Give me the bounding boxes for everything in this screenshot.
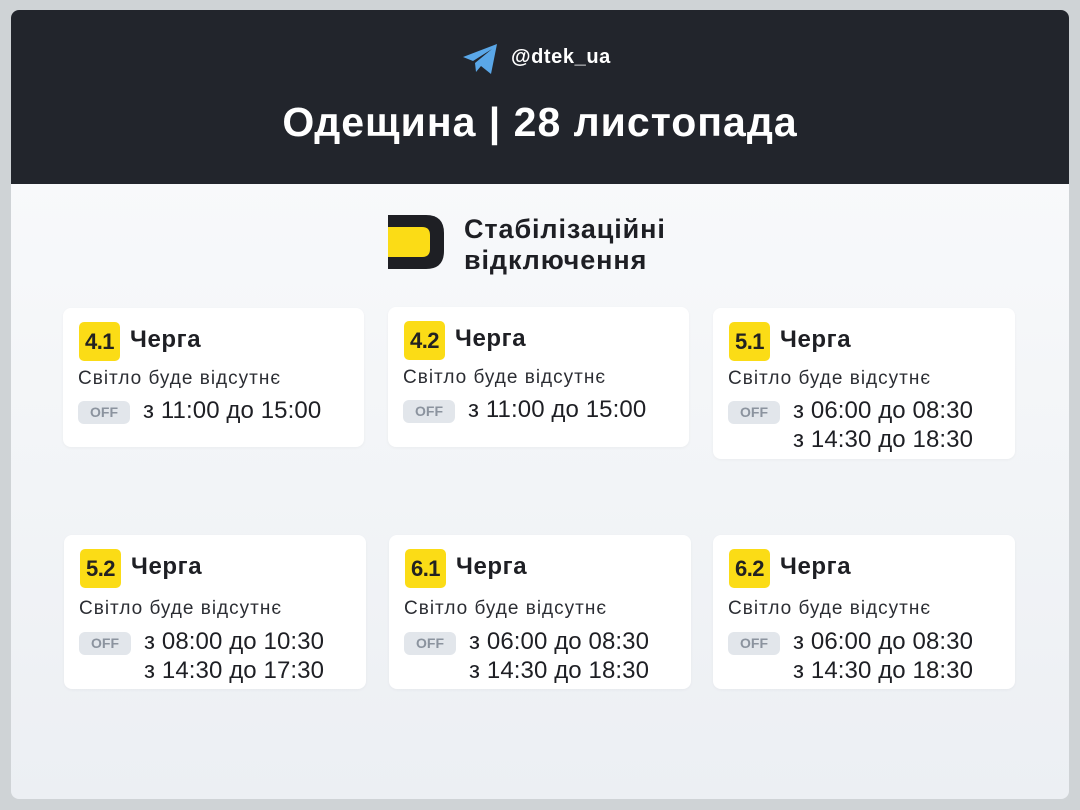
card 6.1 (389, 535, 691, 689)
card 4.2: Світло буде відсутнє (403, 367, 606, 388)
logo block (388, 214, 666, 275)
card 6.2: з 06:00 до 08:30 (793, 628, 973, 655)
card 5.2: з 08:00 до 10:30 (144, 628, 324, 655)
heading text: Стабілізаційні (464, 214, 666, 244)
icon: D logo (388, 215, 444, 269)
icon: telegram (463, 44, 497, 74)
header (11, 10, 1069, 184)
card 5.2 (64, 535, 366, 689)
card 6.2 (713, 535, 1015, 689)
card 4.2: OFF (415, 403, 443, 419)
card 5.1: з 06:00 до 08:30 (793, 397, 973, 424)
card 6.1: OFF (416, 635, 444, 651)
heading text (464, 214, 666, 275)
card 4.1: з 11:00 до 15:00 (143, 397, 321, 424)
card 5.2: Світло буде відсутнє (79, 598, 282, 619)
card 4.1: Світло буде відсутнє (78, 368, 281, 389)
card 6.1: з 14:30 до 18:30 (469, 657, 649, 684)
card 4.2: з 11:00 до 15:00 (468, 396, 646, 423)
handle: @dtek_ua (511, 46, 611, 68)
title: Одещина | 28 листопада (282, 99, 798, 145)
card 4.2: 4.2 (410, 328, 439, 353)
card 6.1: Черга (456, 553, 527, 580)
card 5.1 (713, 308, 1015, 459)
heading text: відключення (464, 245, 647, 275)
card 4.1: 4.1 (85, 329, 114, 354)
card 6.1: Світло буде відсутнє (404, 598, 607, 619)
card 5.2: Черга (131, 553, 202, 580)
card 5.1: з 14:30 до 18:30 (793, 426, 973, 453)
card 6.2: Черга (780, 553, 851, 580)
card 4.1: Черга (130, 326, 201, 353)
card 5.2: OFF (91, 635, 119, 651)
card 4.1: OFF (90, 404, 118, 420)
card 5.2: 5.2 (86, 556, 115, 581)
card 6.2: Світло буде відсутнє (728, 598, 931, 619)
card 6.2: з 14:30 до 18:30 (793, 657, 973, 684)
card 4.2: Черга (455, 325, 526, 352)
card 5.1: Світло буде відсутнє (728, 368, 931, 389)
card 4.1 (63, 308, 364, 447)
card 5.1: Черга (780, 326, 851, 353)
card 5.2: з 14:30 до 17:30 (144, 657, 324, 684)
card 6.1: з 06:00 до 08:30 (469, 628, 649, 655)
card 5.1: 5.1 (735, 329, 764, 354)
card 6.1: 6.1 (411, 556, 440, 581)
card 6.2: OFF (740, 635, 768, 651)
card 4.2 (388, 307, 689, 447)
card 6.2: 6.2 (735, 556, 764, 581)
card 5.1: OFF (740, 404, 768, 420)
